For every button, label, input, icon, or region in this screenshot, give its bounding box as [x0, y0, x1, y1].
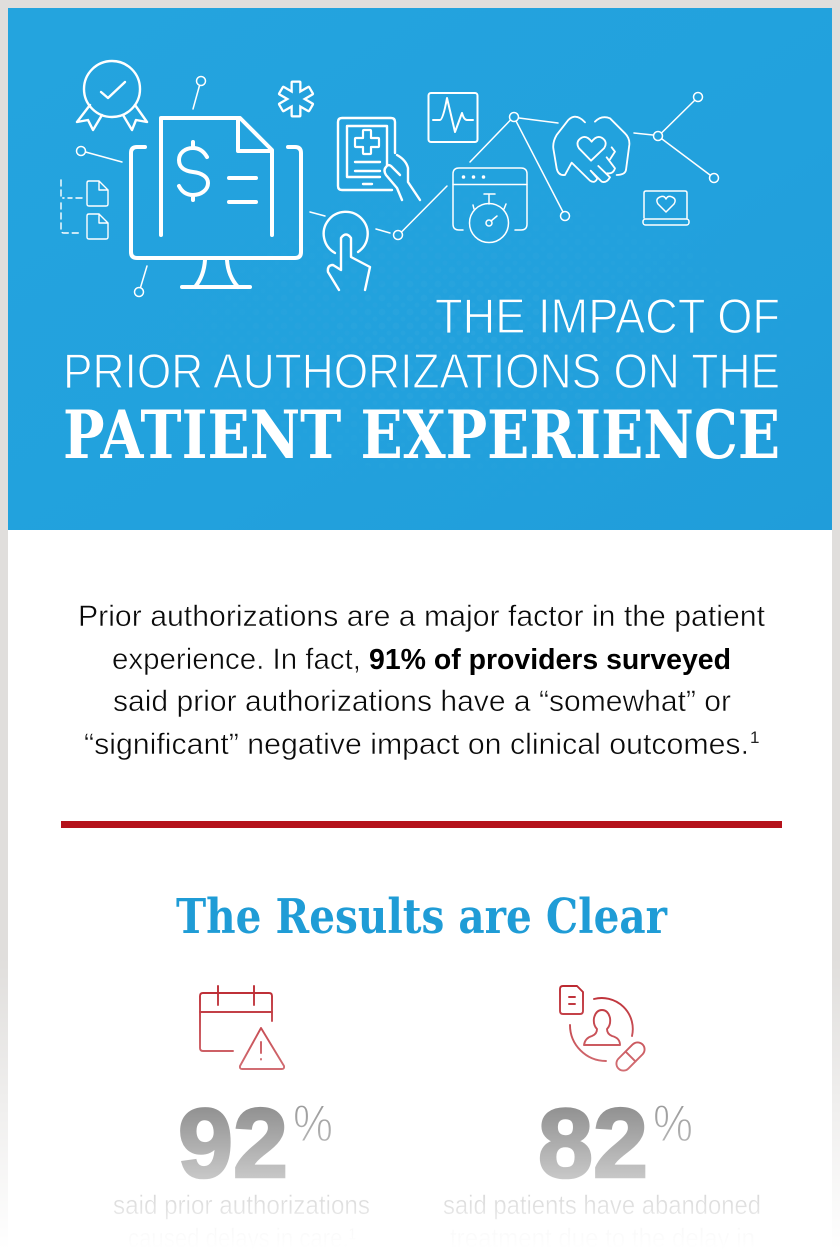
caption: [113, 1190, 370, 1253]
icon: browser with stopwatch: [453, 168, 527, 242]
icon: patient with document and pill: [560, 986, 647, 1073]
intro paragraph: experience. In fact,: [112, 643, 361, 676]
icon: right connector nodes: [634, 92, 718, 182]
icon: award badge: [77, 61, 147, 130]
icon: calendar warning: [200, 986, 284, 1069]
caption: said patients have abandoned: [443, 1190, 761, 1220]
intro paragraph: said prior authorizations have a “somewhat” or: [113, 685, 731, 718]
intro paragraph: 91% of providers surveyed: [369, 644, 731, 676]
icon: star of life: [279, 82, 313, 116]
intro paragraph: [78, 600, 766, 761]
panel: blue header: [8, 8, 832, 530]
intro paragraph: Prior authorizations are a major factor in the patient: [78, 600, 766, 633]
title: THE IMPACT OF: [435, 290, 780, 344]
stat: 82 percent: [443, 986, 761, 1253]
title: [63, 290, 780, 474]
intro paragraph: “significant” negative impact on clinical outcomes.: [84, 728, 749, 761]
icon: ECG monitor: [428, 93, 478, 142]
number: 92: [178, 1088, 288, 1198]
icon: monitor with invoice: [131, 118, 301, 287]
heading: the results are clear: The Results are Clear: [176, 889, 668, 945]
icon: pointing hand: [324, 212, 370, 290]
caption: caused delays in care.¹: [128, 1223, 356, 1253]
icon: connector node with lines: [376, 112, 570, 240]
caption: treatment due to the delay in: [450, 1223, 755, 1253]
icon: laptop with heart: [643, 191, 689, 225]
percent sign: %: [293, 1095, 333, 1153]
icon: hands holding heart: [553, 117, 629, 182]
caption: said prior authorizations: [113, 1190, 370, 1220]
divider: [61, 821, 782, 828]
stat: 92 percent: [113, 986, 370, 1253]
icon: file tree: [61, 180, 108, 239]
icon: connector nodes left: [76, 76, 325, 296]
number: 82: [538, 1088, 648, 1198]
caption: [443, 1190, 761, 1253]
intro paragraph: 1: [750, 728, 759, 747]
title: PRIOR AUTHORIZATIONS ON THE: [63, 345, 780, 399]
icon: tablet with medical cross: [338, 118, 420, 200]
percent sign: %: [653, 1095, 693, 1153]
